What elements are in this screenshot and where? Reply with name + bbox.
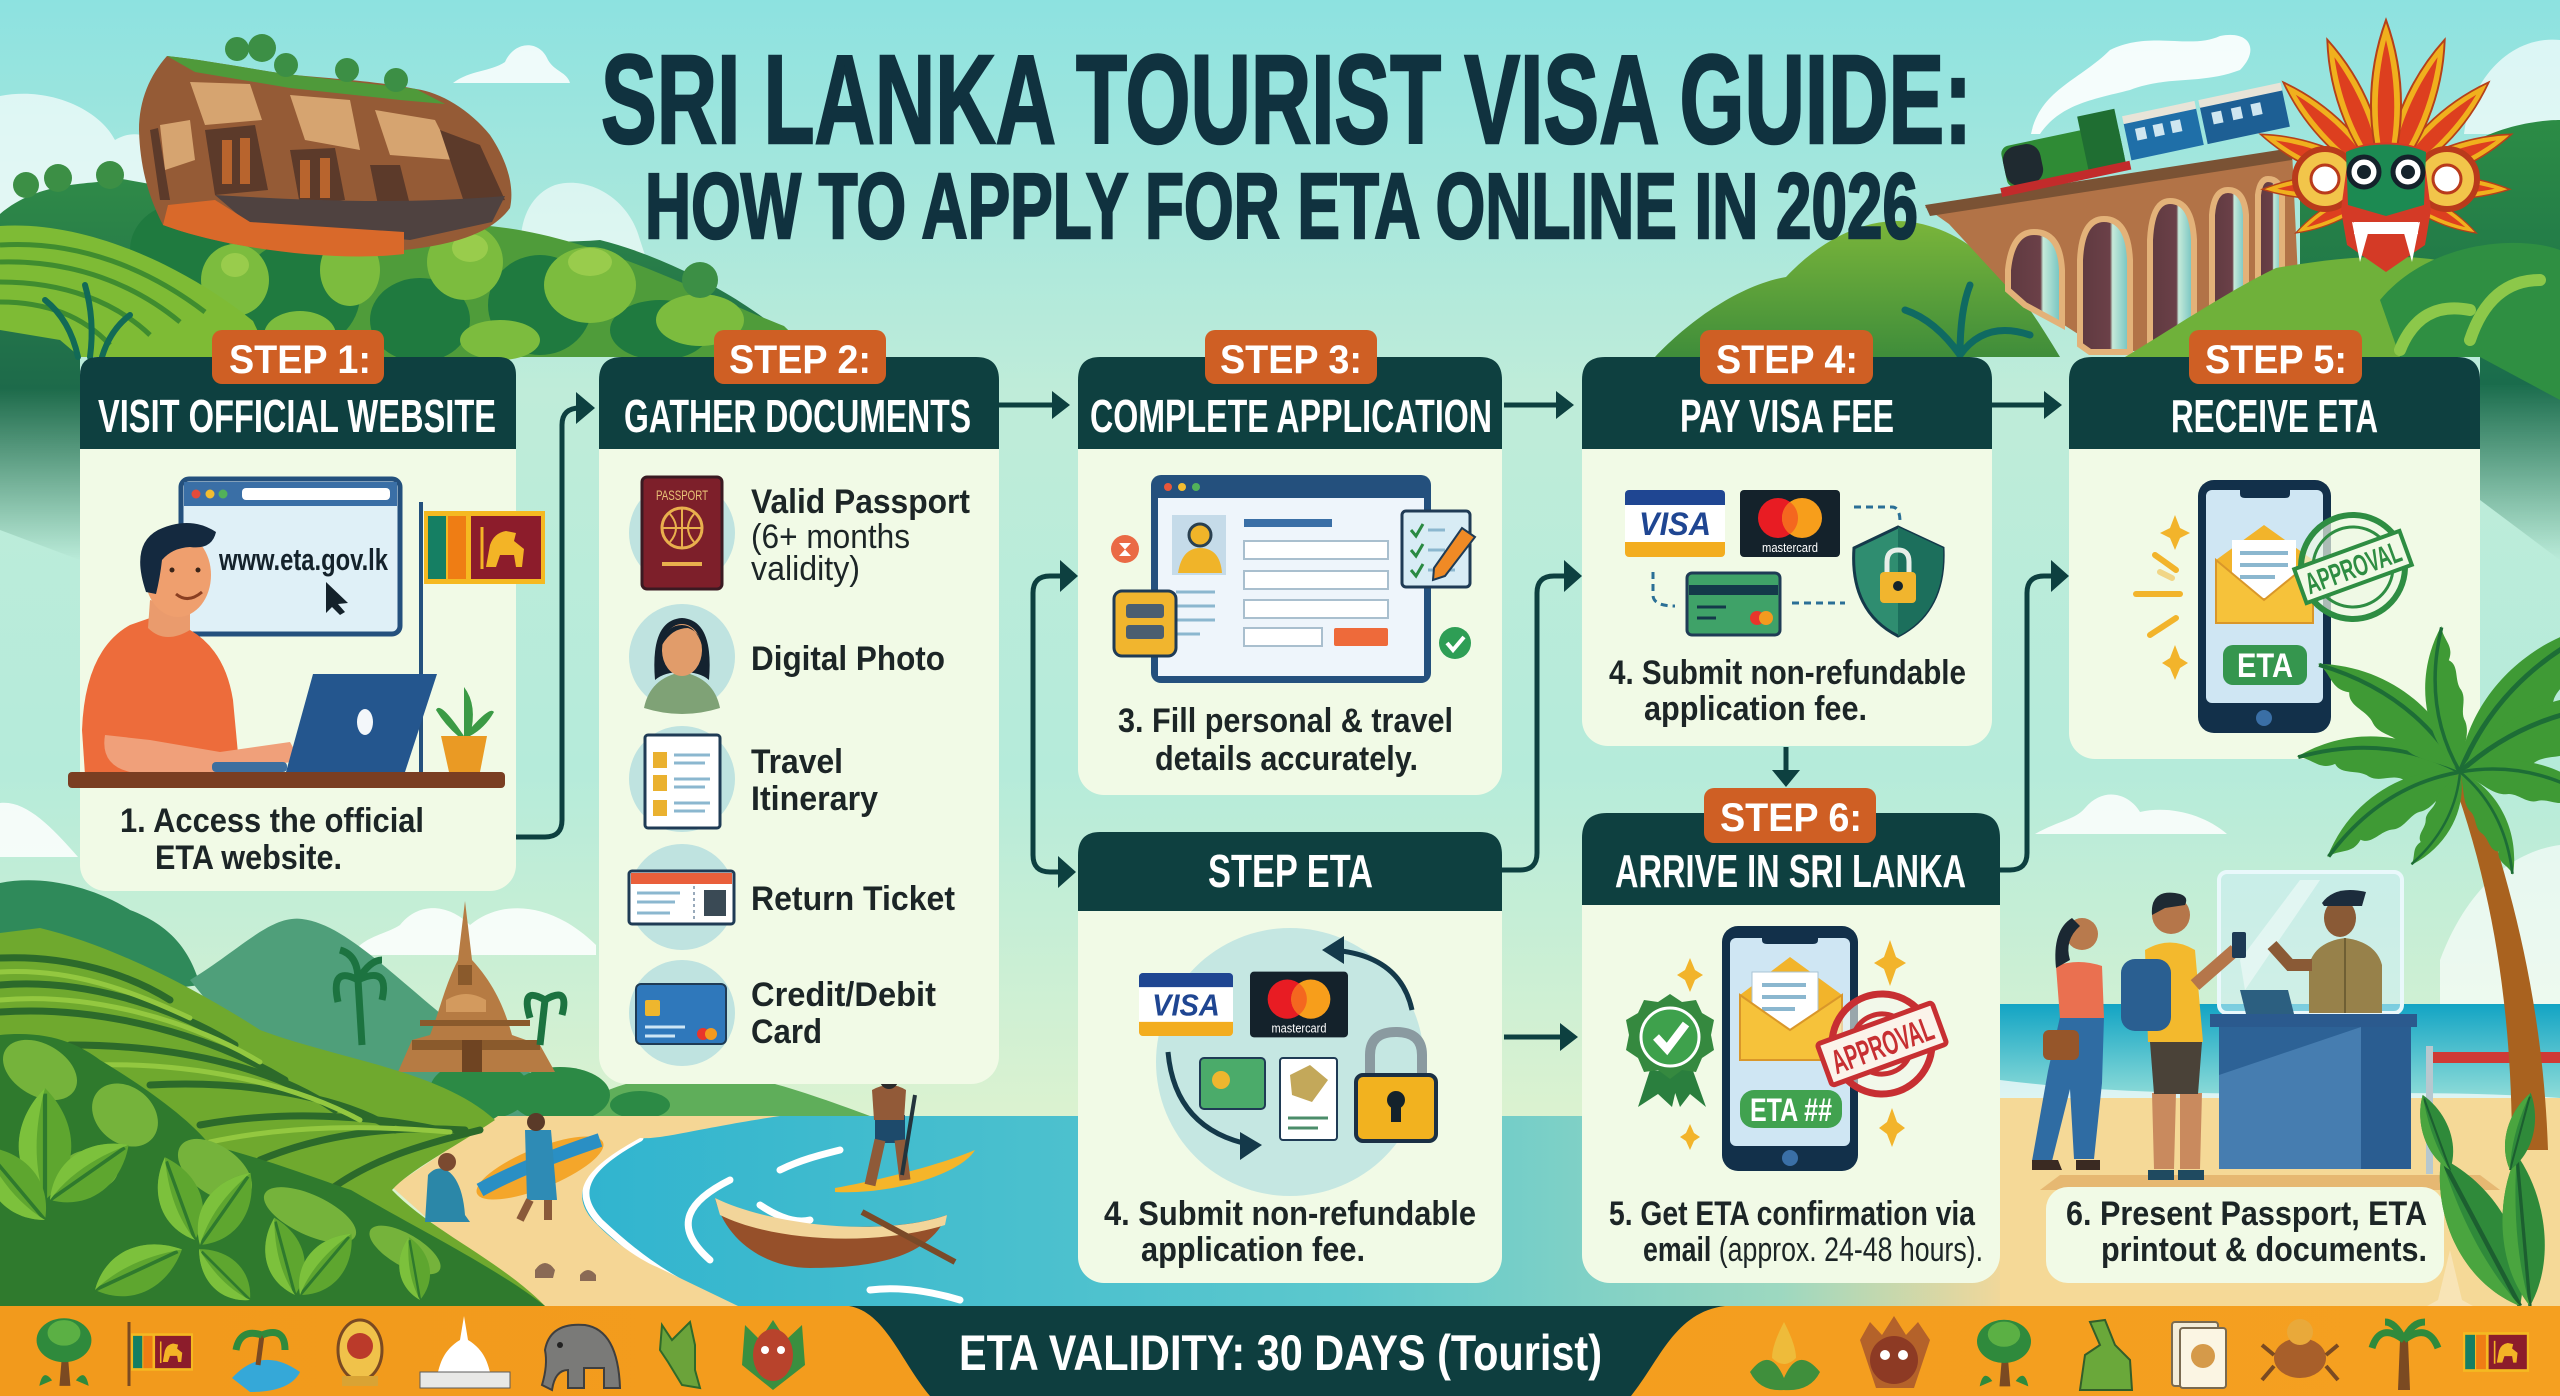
gold sparkles	[1677, 940, 1906, 1150]
Sri Lanka flag	[421, 502, 545, 772]
step 1 badge: STEP 1:	[229, 338, 371, 382]
folder icon	[1114, 591, 1176, 656]
icon: lotus	[1750, 1322, 1820, 1390]
phone with email	[2198, 480, 2331, 733]
padlock	[1356, 1032, 1436, 1141]
orange alert icon	[1111, 535, 1139, 563]
devil mask	[2256, 20, 2516, 272]
caption panel: present passport: 6. Present Passport, ETA	[2066, 1195, 2427, 1233]
icon: stupa	[420, 1316, 510, 1388]
man at laptop	[82, 523, 300, 775]
bottom beach and sea backdrop	[540, 1004, 2560, 1306]
palm trees by stupa	[336, 950, 564, 1045]
phone with email: ETA	[2237, 647, 2293, 685]
panel: step 1 visit official website	[68, 330, 545, 891]
dashed links	[1653, 507, 1900, 606]
credit card item: Credit/Debit	[751, 976, 936, 1014]
caption step 1: ETA website.	[155, 839, 342, 877]
red approval stamp: APPROVAL	[1826, 1010, 1939, 1082]
icon: hill	[2080, 1320, 2132, 1390]
step 2 header: GATHER DOCUMENTS	[624, 390, 971, 442]
caption step 4	[1609, 654, 1966, 728]
step 5 header	[2069, 357, 2480, 449]
top-right hills back	[1655, 120, 2560, 560]
caption step 5: 5. Get ETA confirmation via	[1609, 1195, 1976, 1233]
icon: palm	[2372, 1322, 2438, 1390]
coconut palm	[2295, 595, 2560, 1150]
browser window: www.eta.gov.lk	[218, 542, 389, 577]
caption step 5: email (approx. 24-48 hours).	[1643, 1231, 1983, 1269]
payment cycle illustration	[1139, 928, 1424, 1196]
approval stamp: APPROVAL	[2301, 536, 2406, 601]
checklist and pencil	[1402, 511, 1475, 587]
caption panel: present passport	[2046, 1187, 2444, 1283]
ETA validity banner	[849, 1306, 1725, 1396]
train steam	[2031, 35, 2250, 134]
step 6 header	[1582, 813, 2000, 905]
phone confirmation: ETA ##	[1750, 1092, 1832, 1128]
travel itinerary item: Itinerary	[751, 780, 878, 818]
caption step 3: 3. Fill personal & travel	[1118, 702, 1453, 740]
panel: step 4 pay visa fee	[1582, 330, 1992, 746]
green check	[1439, 627, 1471, 659]
step 2 header	[599, 357, 999, 449]
step 3 header	[1078, 357, 1502, 449]
approval stamp	[2283, 499, 2423, 635]
icon: tree two	[1977, 1320, 2031, 1386]
desk	[68, 772, 505, 788]
icon: elephant	[542, 1325, 620, 1390]
bottom ribbon	[0, 1306, 2560, 1396]
return ticket item	[629, 844, 955, 950]
phone confirmation	[1722, 926, 1858, 1171]
tea terrace hillside	[0, 928, 545, 1312]
officer laptop	[2240, 990, 2294, 1014]
step 4 header: PAY VISA FEE	[1680, 390, 1894, 442]
female traveller	[2032, 918, 2104, 1170]
caption step 3: details accurately.	[1155, 740, 1418, 778]
step ETA header	[1078, 832, 1502, 911]
counter	[2210, 1014, 2417, 1169]
tea terraces top-left	[0, 226, 270, 357]
officer	[2272, 890, 2382, 1013]
step 6 badge	[1704, 788, 1876, 843]
clouds	[0, 40, 2560, 1004]
passport item: Valid Passport	[751, 483, 970, 521]
step 6 header: ARRIVE IN SRI LANKA	[1615, 845, 1966, 897]
digital photo item: Digital Photo	[751, 640, 945, 678]
title	[601, 29, 1972, 258]
red approval stamp	[1808, 976, 1956, 1112]
step 4 header	[1582, 357, 1992, 449]
caption step 4: 4. Submit non-refundable	[1609, 654, 1966, 692]
panel: step 3 complete application	[1078, 330, 1502, 795]
sand beach	[392, 1116, 780, 1306]
passport item: (6+ months	[751, 518, 910, 556]
icon: flag two	[2463, 1332, 2529, 1372]
stanchion and rope	[2426, 1046, 2560, 1174]
paddleboarder	[835, 1071, 975, 1192]
icon: tree	[37, 1318, 91, 1386]
passport item: PASSPORT	[656, 487, 708, 503]
travel itinerary item	[629, 726, 878, 832]
top-right hills front	[1905, 243, 2560, 400]
step 5 badge: STEP 5:	[2205, 338, 2347, 382]
spark rays	[2136, 555, 2180, 635]
step 3 badge: STEP 3:	[1220, 338, 1362, 382]
travel itinerary item: Travel	[751, 743, 843, 781]
icon: flag	[129, 1322, 193, 1386]
step 3 header: COMPLETE APPLICATION	[1090, 390, 1492, 442]
credit card item: Card	[751, 1013, 822, 1051]
green rosette	[1626, 994, 1714, 1107]
wooden boat	[715, 1198, 955, 1268]
potted plant	[436, 687, 494, 772]
green card	[1687, 573, 1780, 635]
passport item: validity)	[751, 550, 860, 588]
step 2 badge: STEP 2:	[729, 338, 871, 382]
caption step 1	[120, 802, 424, 877]
watermark sparkle	[2398, 1250, 2502, 1385]
step 1 header	[80, 357, 516, 449]
step 6 badge: STEP 6:	[1720, 796, 1862, 840]
caption step 1: 1. Access the official	[120, 802, 424, 840]
visa card	[1625, 490, 1725, 557]
top-left jungle hills	[0, 161, 816, 560]
security shield	[1854, 527, 1943, 636]
step 1 header: VISIT OFFICIAL WEBSITE	[98, 390, 496, 442]
male traveller	[2121, 893, 2246, 1180]
icon: island	[232, 1333, 300, 1392]
caption step ETA: 4. Submit non-refundable	[1104, 1195, 1476, 1233]
icon: mask two	[1860, 1316, 1930, 1388]
application form window	[1151, 475, 1431, 683]
far hills and stupa scene	[0, 880, 870, 1123]
digital photo item	[629, 604, 945, 714]
train	[1989, 74, 2292, 197]
icon: passport booklet	[2172, 1322, 2226, 1388]
ETA validity banner: ETA VALIDITY: 30 DAYS (Tourist)	[959, 1325, 1602, 1381]
caption step 4: application fee.	[1644, 690, 1867, 728]
step ETA header: STEP ETA	[1208, 845, 1373, 897]
caption panel: present passport: printout & documents.	[2101, 1231, 2427, 1269]
stupa temple	[398, 901, 555, 1072]
stars	[2160, 515, 2190, 680]
caption step ETA	[1104, 1195, 1476, 1269]
caption step 3	[1118, 702, 1453, 778]
caption step 5	[1609, 1195, 1983, 1269]
icon: carving	[660, 1322, 700, 1388]
panel: step 2 gather documents	[599, 330, 999, 1084]
panel: step ETA	[1078, 832, 1502, 1283]
mastercard	[1740, 490, 1840, 557]
laptop	[212, 674, 437, 772]
small trees	[13, 161, 718, 298]
front right palm leaves	[2410, 1089, 2551, 1319]
step 4 badge: STEP 4:	[1716, 338, 1858, 382]
step 5 header: RECEIVE ETA	[2171, 390, 2378, 442]
icon: mask	[742, 1320, 805, 1390]
icon: emblem	[338, 1320, 382, 1386]
beach rocks	[535, 1263, 596, 1281]
return ticket item: Return Ticket	[751, 880, 955, 918]
immigration counter scene	[2032, 872, 2560, 1180]
passport item	[629, 477, 970, 589]
viaduct bridge	[1925, 148, 2300, 352]
credit card item	[629, 960, 936, 1066]
panel: step 6 arrive in Sri Lanka	[1582, 788, 2000, 1283]
browser window	[181, 479, 400, 634]
connector arrows	[516, 391, 2069, 1051]
caption step ETA: application fee.	[1141, 1231, 1365, 1269]
beach people with surfboard	[425, 1113, 611, 1281]
panel: step 5 receive ETA	[2069, 330, 2480, 759]
icon: crab	[2262, 1319, 2338, 1380]
Sigiriya rock	[139, 34, 511, 256]
title: HOW TO APPLY FOR ETA ONLINE IN 2026	[645, 154, 1918, 258]
